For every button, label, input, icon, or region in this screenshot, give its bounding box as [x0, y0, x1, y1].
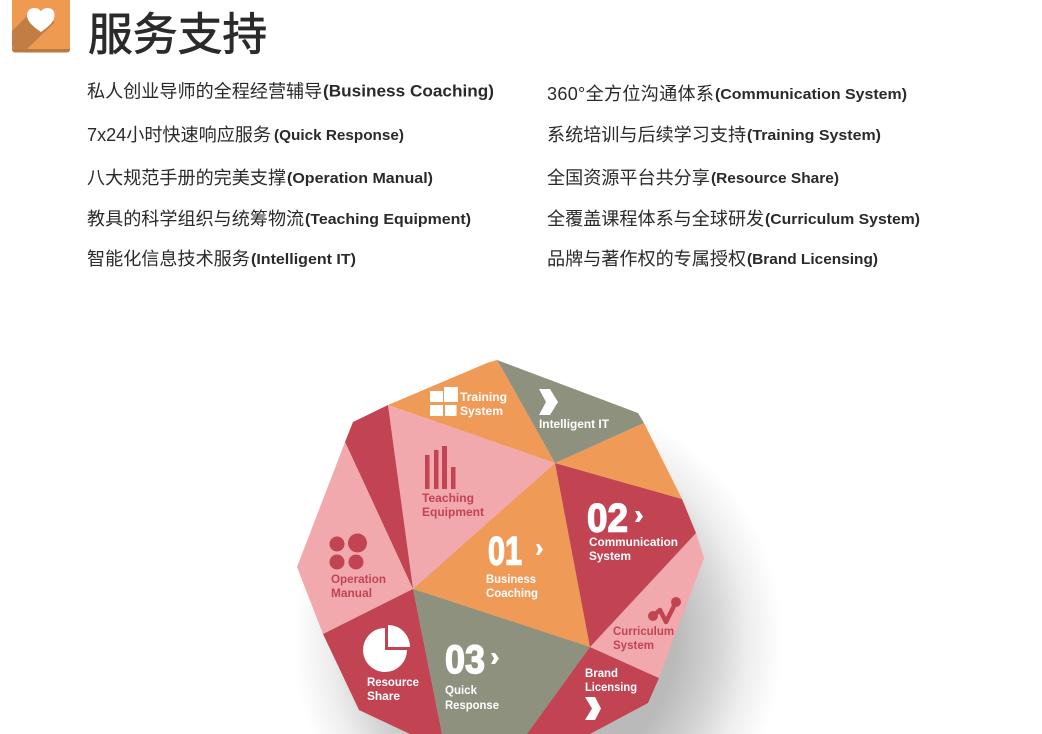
segment: resource share — [323, 589, 442, 734]
number: 01: 01 — [488, 530, 522, 574]
label: operation manual: Manual — [331, 586, 372, 600]
label: teaching equipment: Teaching — [422, 491, 474, 505]
item: resource share — [547, 168, 839, 188]
label: operation manual: Operation — [331, 572, 386, 586]
segment: intelligent IT — [497, 360, 644, 463]
label: brand licensing — [585, 666, 637, 694]
label: curriculum system: Curriculum — [613, 624, 674, 638]
segment: communication system — [555, 463, 696, 647]
item: brand licensing: (Brand Licensing) — [747, 251, 878, 268]
item: brand licensing — [547, 249, 878, 269]
title: 服务支持 — [88, 10, 267, 60]
label: resource share: Share — [367, 689, 400, 703]
label: curriculum system: System — [613, 638, 654, 652]
item: business coaching — [87, 82, 494, 102]
label: business coaching: Coaching — [486, 586, 538, 600]
item: intelligent IT: (Intelligent IT) — [251, 251, 356, 268]
item: teaching equipment — [87, 209, 471, 229]
label: quick response — [445, 683, 499, 712]
label: intelligent IT: Intelligent IT — [539, 417, 610, 431]
icon: training squares — [430, 387, 458, 416]
label: communication system — [589, 535, 678, 563]
number: 03: 03 — [445, 638, 485, 682]
label: training system — [460, 390, 507, 418]
label: curriculum system — [613, 624, 674, 652]
icon: heart badge — [12, 0, 70, 52]
segment: business coaching — [413, 463, 590, 647]
item: operation manual — [87, 168, 433, 188]
item: communication system: 360°全方位沟通体系 — [547, 84, 714, 104]
number: 02: 02 — [587, 496, 628, 540]
item: teaching equipment: 教具的科学组织与统筹物流 — [87, 209, 304, 229]
item: curriculum system: (Curriculum System) — [765, 211, 920, 228]
item: training system: 系统培训与后续学习支持 — [547, 125, 746, 145]
label: training system: System — [460, 404, 503, 418]
list: right column — [547, 84, 920, 269]
segment: training system — [388, 360, 555, 463]
item: training system: (Training System) — [747, 127, 881, 144]
label: resource share — [367, 675, 419, 703]
label: business coaching — [486, 572, 538, 600]
segment: quick response — [413, 589, 590, 734]
label: quick response: Response — [445, 698, 499, 712]
label: brand licensing: Brand — [585, 666, 618, 680]
icon: bars — [425, 446, 456, 489]
polygon diagram — [297, 360, 704, 734]
label: resource share: Resource — [367, 675, 419, 689]
item: operation manual: 八大规范手册的完美支撑 — [87, 168, 286, 188]
item: resource share: (Resource Share) — [711, 170, 839, 187]
label: communication system: System — [589, 549, 631, 563]
label: brand licensing: Licensing — [585, 680, 637, 694]
item: communication system — [547, 84, 907, 104]
item: intelligent IT: 智能化信息技术服务 — [87, 249, 250, 269]
list: left column — [87, 82, 494, 269]
segment: orange right — [555, 423, 682, 499]
segment: operation manual — [297, 442, 413, 634]
label: training system: Training — [460, 390, 507, 404]
label: quick response: Quick — [445, 683, 477, 697]
icon: chevron brand — [585, 697, 601, 720]
icon: pie — [363, 625, 410, 672]
item: training system — [547, 125, 881, 145]
icon: four circles — [330, 534, 367, 570]
label: teaching equipment: Equipment — [422, 505, 484, 519]
item: brand licensing: 品牌与著作权的专属授权 — [547, 249, 746, 269]
item: resource share: 全国资源平台共分享 — [547, 168, 710, 188]
segment: brand licensing — [527, 647, 659, 734]
segment: curriculum system — [590, 533, 704, 678]
item: communication system: (Communication System) — [715, 86, 907, 103]
item: quick response: 7x24小时快速响应服务 — [87, 125, 271, 145]
item: teaching equipment: (Teaching Equipment) — [305, 211, 471, 228]
label: operation manual — [331, 572, 386, 600]
icon: chevron intelligent — [539, 389, 558, 415]
icon: curriculum line — [648, 597, 681, 622]
item: curriculum system — [547, 209, 920, 229]
item: business coaching: (Business Coaching) — [323, 82, 494, 100]
label: teaching equipment — [422, 491, 484, 519]
item: operation manual: (Operation Manual) — [287, 170, 433, 187]
item: business coaching: 私人创业导师的全程经营辅导 — [87, 82, 322, 102]
chart shadow — [288, 390, 788, 734]
item: intelligent IT — [87, 249, 356, 269]
item: quick response: (Quick Response) — [274, 127, 404, 144]
label: business coaching: Business — [486, 572, 536, 586]
item: curriculum system: 全覆盖课程体系与全球研发 — [547, 209, 764, 229]
segment: teaching equipment — [388, 405, 555, 589]
segment: red sliver — [345, 405, 413, 589]
item: quick response — [87, 125, 404, 145]
label: communication system: Communication — [589, 535, 678, 549]
